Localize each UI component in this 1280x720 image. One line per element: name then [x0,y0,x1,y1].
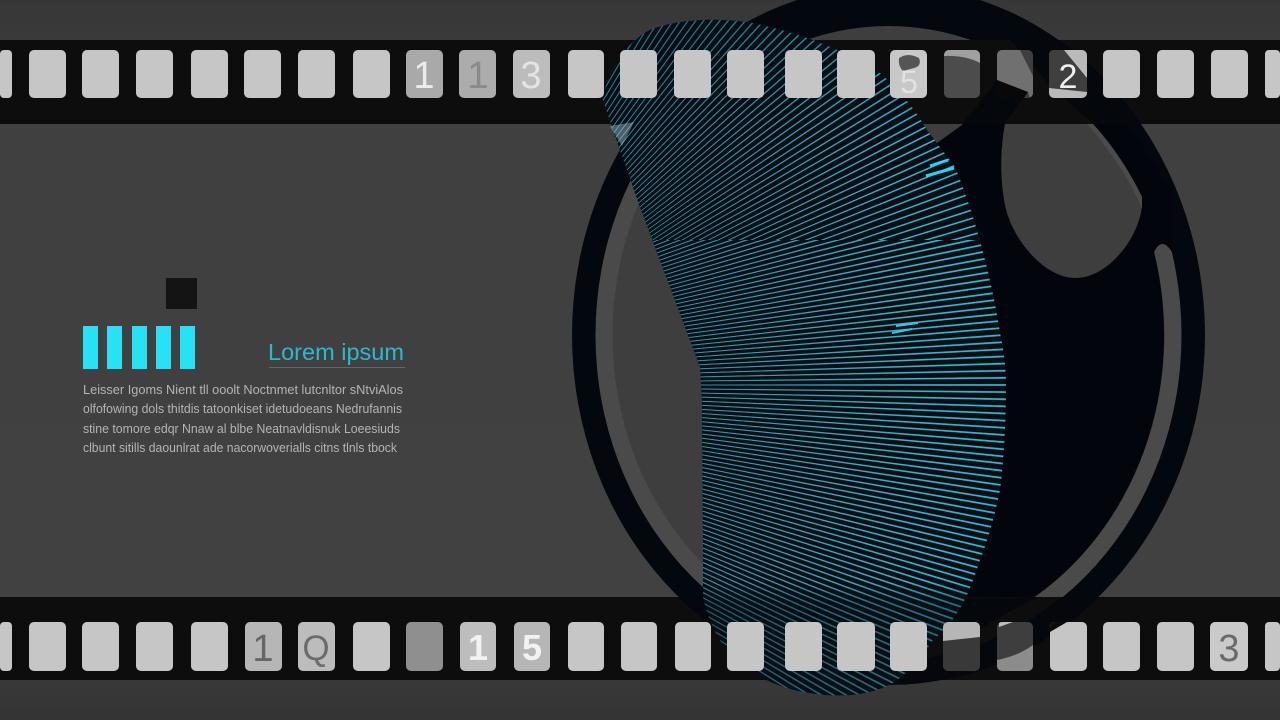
reel dark crescent [900,60,1172,644]
hole with reel overlap and digit 5: 5 [900,64,918,100]
bottom hole with reel band [997,622,1033,671]
reel window opening [1001,85,1142,278]
film band: bottom [0,597,1280,680]
body text: Leisser Igoms Nient tll ooolt Noctnmet lutcnltor sNtviAlos [83,383,403,397]
pale highlight patch [610,122,634,146]
hole with reel band [997,50,1033,98]
hole with digit 2 [1049,50,1087,98]
bottom strip digits: 1 [468,627,488,668]
hole with digit 2: 2 [1059,58,1077,96]
body text: stine tomore edqr Nnaw al blbe Neatnavldisnuk Loeesiuds [83,422,400,436]
hole with reel overlap [944,50,980,98]
reel interior [612,26,1164,644]
top film strip holes [0,50,1280,98]
bottom film strip holes [0,622,1280,671]
body text [83,383,403,455]
film band: top [0,40,1280,124]
cyan glint centre [892,323,918,333]
bottom strip digits [252,627,1240,670]
reel inner stripe [596,180,1182,597]
window edge stripe [1050,85,1142,209]
heading: Lorem ipsum [268,339,404,365]
top strip digits: 1 [413,55,435,97]
bottom strip digits: 3 [1218,628,1240,670]
top strip digits [413,55,542,97]
body text: clbunt sitills daounlrat ade nacorwoverialls citns tlnls tbock [83,441,398,455]
reel seen through bands [678,40,1141,680]
reel outer ring [572,0,1205,685]
cyan glint upper [926,160,954,176]
top strip digits: 3 [520,55,542,97]
bottom strip digits: 1 [252,628,274,670]
radial line fan [590,10,1020,700]
hole with reel overlap and digit 5 [890,50,927,100]
cyan bars [83,326,195,369]
black square marker [166,278,197,309]
bottom strip digits: 5 [522,627,542,668]
body text: olfofowing dols thitdis tatoonkiset idetudoeans Nedrufannis [83,402,402,416]
bottom hole with reel overlap [943,622,980,671]
film reel [572,0,1205,685]
bottom strip digits: Q [302,629,330,668]
top strip digits: 1 [467,55,489,97]
bottom hole with cut corner [1050,622,1087,671]
